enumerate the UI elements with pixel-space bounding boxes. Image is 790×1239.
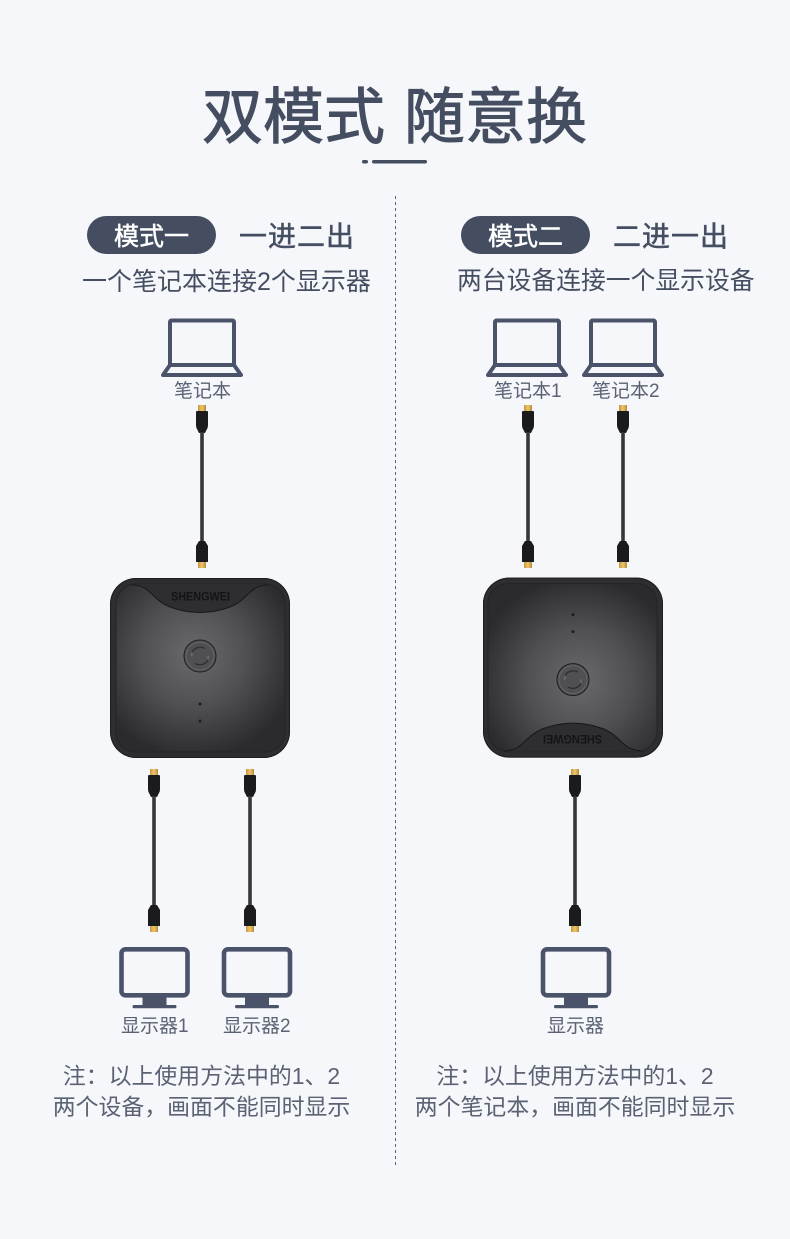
- title: 双模式 随意换: [202, 83, 587, 151]
- note: right: 注：以上使用方法中的1、2: [436, 1063, 714, 1089]
- description: 一个笔记本连接2个显示器: [82, 268, 371, 296]
- cable: laptop to switch: [196, 405, 208, 568]
- icon: display: [543, 949, 609, 1008]
- note: left: [53, 1063, 350, 1120]
- cable: switch to display 2: [244, 769, 256, 932]
- label: laptop 2: 笔记本2: [592, 381, 660, 402]
- device: switch left: [110, 575, 290, 758]
- heading: one in two out: 一进二出: [239, 221, 355, 252]
- heading: two in one out: 二进一出: [613, 221, 729, 252]
- badge: mode one: [87, 216, 216, 254]
- icon: laptop: [163, 320, 241, 375]
- note: right: [415, 1063, 735, 1120]
- badge: mode one: 模式一: [114, 223, 189, 251]
- icon: display 2: [224, 949, 290, 1008]
- icon: display 1: [122, 949, 188, 1008]
- title underline: [362, 160, 427, 164]
- cable: switch to display: [569, 769, 581, 932]
- label: display 1: 显示器1: [121, 1016, 189, 1037]
- note: left: 两个设备，画面不能同时显示: [53, 1094, 350, 1120]
- cable: switch to display 1: [148, 769, 160, 932]
- icon: laptop 1: [488, 320, 566, 375]
- label: display 2: 显示器2: [223, 1016, 291, 1037]
- device: switch right: [483, 578, 663, 761]
- badge: mode two: [461, 216, 590, 254]
- panel: mode one: [82, 216, 371, 296]
- note: left: 注：以上使用方法中的1、2: [63, 1063, 340, 1089]
- badge: mode two: 模式二: [488, 223, 563, 251]
- note: right: 两个笔记本，画面不能同时显示: [415, 1094, 735, 1120]
- cable: laptop 2 to switch: [617, 405, 629, 568]
- label: display: 显示器: [547, 1016, 604, 1037]
- label: laptop: 笔记本: [174, 381, 231, 402]
- panel: mode two: [457, 216, 755, 295]
- description: 两台设备连接一个显示设备: [457, 268, 755, 295]
- cable: laptop 1 to switch: [522, 405, 534, 568]
- icon: laptop 2: [584, 320, 662, 375]
- label: laptop 1: 笔记本1: [494, 381, 562, 402]
